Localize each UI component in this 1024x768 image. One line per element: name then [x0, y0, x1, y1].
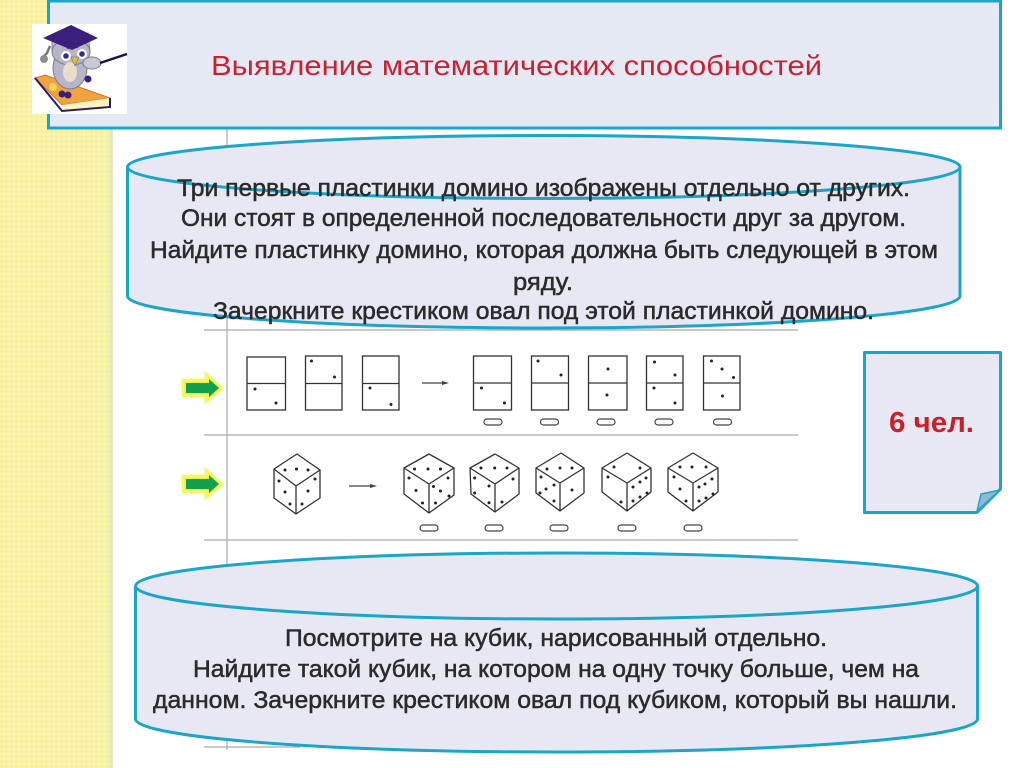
instruction text: Они стоят в определенной последовательности друг за другом. — [181, 205, 906, 232]
domino row: answer ovals — [484, 419, 732, 425]
panel: lower cylinder with instructions — [136, 553, 978, 752]
worksheet scan rule lines — [204, 128, 798, 750]
instruction text: Зачеркните крестиком овал под этой пластинкой домино. — [213, 298, 874, 325]
instruction text: Найдите такой кубик, на котором на одну точку больше, чем на — [193, 656, 920, 683]
panel: header — [48, 1, 1000, 128]
instruction text — [150, 175, 938, 325]
background: yellow side strip — [0, 0, 113, 768]
instruction text: Найдите пластинку домино, которая должна быть следующей в этом — [150, 237, 938, 264]
arrow: green pointer row 1 — [183, 374, 222, 402]
instruction text: Посмотрите на кубик, нарисованный отдельно. — [285, 625, 827, 652]
title: Выявление математических способностей — [211, 50, 822, 81]
count label: 6 чел. — [889, 407, 974, 439]
arrow: cube row — [349, 484, 377, 488]
cube row: sample cube — [274, 454, 320, 514]
arrow: green pointer row 2 — [183, 470, 222, 498]
icon: owl on a book — [32, 24, 127, 114]
callout: folded note with count — [864, 352, 1000, 512]
panel: upper cylinder with instructions — [128, 136, 960, 328]
instruction text: данном. Зачеркните крестиком овал под кубиком, который вы нашли. — [153, 687, 957, 714]
cube row: answer options — [404, 453, 718, 513]
cube row: answer ovals — [420, 525, 702, 531]
arrow: domino row — [422, 381, 449, 385]
instruction text: Три первые пластинки домино изображены отдельно от других. — [177, 175, 910, 202]
domino row: sample tiles — [247, 356, 399, 410]
instruction text: ряду. — [513, 269, 573, 296]
domino row: answer options — [474, 356, 740, 410]
instruction text — [153, 625, 957, 714]
